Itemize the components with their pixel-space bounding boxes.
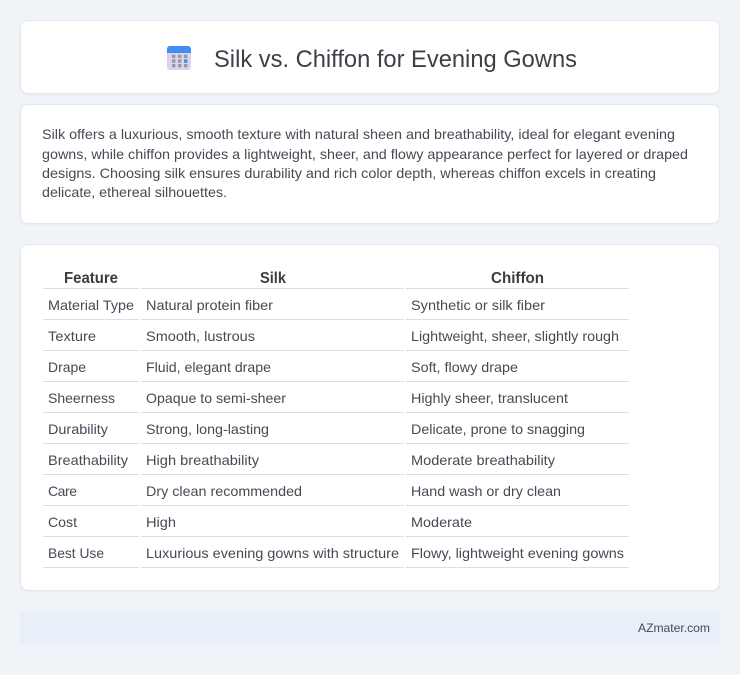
table header: Chiffon [491,270,544,287]
table header: Silk [260,270,286,287]
row: cost: Moderate [411,514,472,530]
row: sheerness [48,390,568,406]
row: material type: Material Type [48,297,134,313]
intro text: designs. Choosing silk ensures durability and rich color depth, whereas chiffon excels in creating [42,165,656,181]
row: care [48,483,561,499]
row: breathability: High breathability [146,452,259,468]
row: cost [48,514,472,530]
row: best use: Best Use [48,545,104,561]
row: texture: Lightweight, sheer, slightly rough [411,328,619,344]
row: drape: Fluid, elegant drape [146,359,271,375]
intro text: gowns, while chiffon provides a lightweight, sheer, and flowy appearance perfect for layered or draped [42,146,688,162]
row: drape: Drape [48,359,86,375]
title: Silk vs. Chiffon for Evening Gowns [214,46,577,73]
row: texture: Smooth, lustrous [146,328,255,344]
row: care: Dry clean recommended [146,483,302,499]
icon: calendar [167,46,191,70]
panel: header [20,20,720,94]
row: material type: Natural protein fiber [146,297,273,313]
table header [64,270,544,287]
row: care: Hand wash or dry clean [411,483,561,499]
row: breathability [48,452,555,468]
row: breathability: Moderate breathability [411,452,555,468]
row: best use: Luxurious evening gowns with structure [146,545,399,561]
panel: intro [20,104,720,224]
row: material type: Synthetic or silk fiber [411,297,545,313]
intro text: delicate, ethereal silhouettes. [42,184,227,200]
table header: Feature [64,270,118,287]
row: care: Care [48,483,77,499]
row: durability: Strong, long-lasting [146,421,269,437]
row: cost: High [146,514,176,530]
row: best use [48,545,624,561]
row: durability [48,421,585,437]
row: durability: Delicate, prone to snagging [411,421,585,437]
row: sheerness: Highly sheer, translucent [411,390,568,406]
row: best use: Flowy, lightweight evening gowns [411,545,624,561]
row: breathability: Breathability [48,452,128,468]
row: cost: Cost [48,514,77,530]
row: texture [48,328,619,344]
row: texture: Texture [48,328,96,344]
footer text: AZmater.com [638,621,710,635]
row: durability: Durability [48,421,108,437]
row: sheerness: Sheerness [48,390,115,406]
intro text [42,126,688,200]
row: material type [48,297,545,313]
panel: table [20,244,720,591]
comparison table [43,270,629,568]
panel: footer [20,611,720,645]
intro text: Silk offers a luxurious, smooth texture with natural sheen and breathability, ideal for elegant evening [42,126,675,142]
row: drape [48,359,518,375]
row: sheerness: Opaque to semi-sheer [146,390,286,406]
row: drape: Soft, flowy drape [411,359,518,375]
